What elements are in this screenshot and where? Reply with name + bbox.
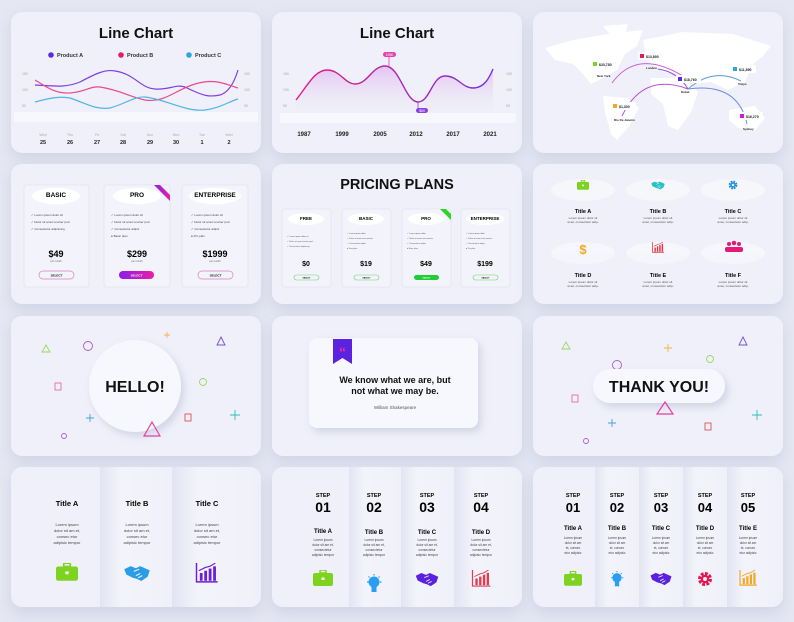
item: title E: amet, consectetur adip- (642, 284, 674, 288)
x axis labels: Mon (173, 133, 179, 137)
card: pro: SELECT (423, 278, 431, 280)
item: title F: Lorem ipsum dolor sit (719, 280, 748, 284)
column: title A: Title A (56, 499, 79, 508)
column: title C: adipisic tempor (194, 540, 221, 545)
item: title D: amet, consectetur adip- (567, 284, 599, 288)
line chart: 150 (244, 72, 250, 76)
step 03: 03 (654, 500, 668, 515)
line chart: 150 (22, 72, 28, 76)
column: title B: adipisic tempor (124, 540, 151, 545)
card: pro: ● Basic plan (407, 248, 418, 250)
step 03: Title C (652, 526, 671, 532)
card: pro: ✓ Lorem ipsum dolor sit (111, 213, 143, 217)
card: enterprise: ● Pro plan (191, 234, 205, 238)
legend: Product A (57, 53, 83, 59)
card: enterprise: SELECT (482, 278, 490, 280)
map continents (545, 24, 771, 140)
column: title A (54, 499, 81, 581)
title: Line Chart (360, 25, 434, 42)
step 01: etur adipisic (564, 551, 582, 555)
card: free: FREE (300, 216, 312, 221)
card: basic: ✓ Dolor sit amet concter pod (31, 220, 70, 224)
card: enterprise: ✓ Dolor sit amet concter pod (191, 220, 230, 224)
area line chart: 50 (506, 104, 510, 108)
value tags: $16,270 (746, 115, 759, 119)
card: enterprise: $199 (477, 261, 493, 268)
step 02: dolor sit am (609, 541, 626, 545)
item: title F (717, 241, 749, 288)
step 01: STEP (566, 493, 581, 499)
area line chart: 150 (283, 72, 289, 76)
step 05: 05 (741, 500, 755, 515)
step 04: et, consec (698, 546, 713, 550)
value tags: $18,760 (684, 78, 697, 82)
legend (48, 52, 221, 59)
step 03: Lorem ipsum (417, 538, 437, 542)
step 03: adipisic tempor (416, 553, 439, 557)
card: pro: PRO (421, 216, 431, 221)
panel: five steps (533, 467, 783, 607)
item: title D: $ (579, 242, 587, 257)
item: title E (642, 242, 674, 288)
step 04: STEP (474, 493, 489, 499)
hello circle (89, 340, 181, 432)
x axis labels: Sat (120, 133, 126, 137)
step 04: consectetur (472, 548, 490, 552)
step 04: Title D (696, 526, 715, 532)
year labels: 1987 (297, 132, 311, 138)
item: title E: Lorem ipsum dolor sit (644, 280, 672, 284)
quote card: William Shakespeare (374, 405, 417, 410)
area line chart: $50 (419, 109, 425, 113)
item: title B: Title B (650, 209, 666, 215)
decorative shapes (562, 337, 762, 444)
card: basic: SELECT (51, 274, 63, 278)
step 02: Title B (608, 526, 627, 532)
city labels: New York (597, 74, 611, 78)
step 04: 04 (698, 500, 713, 515)
card: basic: ● Free plan (347, 248, 357, 250)
column: title B: Lorem ipsum (125, 522, 149, 527)
card: basic: BASIC (359, 216, 374, 221)
step 05: etur adipisic (739, 551, 757, 555)
card: basic: $19 (360, 261, 372, 268)
card: basic: per month (50, 260, 62, 263)
column: title A: dolor sit am et, (54, 528, 80, 533)
card: pro (104, 185, 170, 287)
card: enterprise: SELECT (210, 274, 222, 278)
step 04: Title D (472, 530, 491, 536)
line chart: 100 (22, 88, 28, 92)
step 03: STEP (654, 493, 669, 499)
card: basic (24, 185, 89, 287)
icon: bookmark quote: “ (339, 344, 346, 360)
decorative shapes (42, 332, 240, 438)
title: PRICING PLANS (340, 177, 454, 193)
card: basic: ✓ Lorem ipsum dolor (347, 232, 366, 235)
item: title D (567, 242, 599, 288)
step 02: 02 (366, 499, 382, 515)
value tags: $13,890 (646, 55, 659, 59)
quote card (309, 338, 478, 428)
step 03: Title C (418, 530, 437, 536)
panel: line chart years (272, 12, 522, 153)
step 02: et, consec (610, 546, 625, 550)
x axis labels: 2 (227, 140, 231, 146)
column: title B: Title B (126, 499, 149, 508)
value tags: $1,300 (619, 105, 630, 109)
quote text: not what we may be. (351, 386, 439, 396)
item: title A: Title A (575, 209, 591, 215)
column: title C: Lorem ipsum (195, 522, 219, 527)
step 01: consectetur (314, 548, 332, 552)
step 01: adipisic tempor (312, 553, 335, 557)
step 03: et, consec (654, 546, 669, 550)
city labels: Dubai (681, 90, 690, 94)
x axis labels: 27 (94, 140, 100, 146)
step 01: Lorem ipsum (313, 538, 333, 542)
step 03: 03 (419, 499, 435, 515)
item: title C: Title C (725, 209, 741, 215)
card: basic: ✓ Consectetur adipiscing (31, 227, 65, 231)
step 02: Lorem ipsum (608, 536, 627, 540)
city labels (597, 66, 754, 131)
step 01: dolor sit am et, (312, 543, 334, 547)
card: enterprise: ENTERPRISE (471, 216, 499, 221)
step 01: STEP (316, 493, 331, 499)
year labels: 1999 (335, 132, 349, 138)
panel: pricing plans 4 (272, 164, 522, 304)
line chart: 50 (22, 104, 26, 108)
card: basic: BASIC (46, 192, 66, 199)
step 03: STEP (420, 493, 435, 499)
x axis labels: Wed (39, 133, 47, 137)
x axis labels: Tue (199, 133, 205, 137)
panel: world map (533, 12, 783, 153)
item: title D: Lorem ipsum dolor sit (569, 280, 598, 284)
column: title A: consec etur (57, 534, 78, 539)
step 02: dolor sit am et, (363, 543, 385, 547)
step 01 (564, 493, 583, 586)
value tags (591, 52, 763, 120)
item: title C (717, 182, 749, 224)
step 04: adipisic tempor (470, 553, 493, 557)
item: title D: Title D (575, 273, 591, 279)
column: title B: dolor sit am et, (124, 528, 150, 533)
panel: line chart products (11, 12, 261, 153)
step 03: Lorem ipsum (652, 536, 671, 540)
area line chart: 150 (506, 72, 512, 76)
step 05: dolor sit am (740, 541, 757, 545)
triangle accent (657, 402, 673, 414)
column: title C: Title C (196, 499, 219, 508)
step 04: STEP (698, 493, 713, 499)
card: enterprise (461, 209, 510, 287)
item: title C: amet, consectetur adip- (717, 220, 749, 224)
card: free: ✓ Lorem ipsum dolor sit (287, 235, 309, 238)
card: pro: $299 (127, 249, 147, 259)
city labels: Sydney (743, 127, 754, 131)
step 04: dolor sit am et, (470, 543, 492, 547)
step 05: Title E (739, 526, 757, 532)
step 04: Lorem ipsum (471, 538, 491, 542)
card: enterprise: ENTERPRISE (194, 192, 236, 199)
card: free: ✓ Dolor sit amet concter pod (287, 240, 313, 243)
step 02: STEP (610, 493, 625, 499)
legend: Product C (195, 53, 221, 59)
card: enterprise: $1999 (202, 249, 228, 259)
column: title B (124, 499, 151, 581)
x axis labels: Thu (67, 133, 73, 137)
step 05: et, consec (741, 546, 756, 550)
step 02 (363, 493, 386, 592)
line chart: 100 (244, 88, 250, 92)
step 02: Lorem ipsum (364, 538, 384, 542)
legend: Product B (127, 53, 153, 59)
area line chart: 100 (283, 88, 289, 92)
column: title A: adipisic tempor (54, 540, 81, 545)
area line chart (280, 52, 516, 123)
routes (612, 64, 747, 124)
x axis labels: 30 (173, 140, 179, 146)
x axis labels: Sun (147, 133, 153, 137)
step 03 (650, 493, 672, 585)
year labels: 2005 (373, 132, 387, 138)
step 02: STEP (367, 493, 382, 499)
area line chart: 1950 (386, 53, 393, 57)
year labels (297, 132, 497, 138)
card: pro: per month (131, 260, 143, 263)
column: title C (194, 499, 221, 582)
step 03: etur adipisic (652, 551, 670, 555)
card: basic: $49 (48, 249, 64, 259)
card: enterprise: ● Pro plan (466, 248, 475, 250)
card: basic (342, 209, 391, 287)
year labels: 2012 (409, 132, 423, 138)
x axis labels: 25 (40, 140, 46, 146)
step 01: 01 (566, 500, 580, 515)
card: basic: ✓ Consectetur adipis (347, 242, 366, 245)
card: basic: ✓ Dolor sit amet cons mecter (347, 237, 373, 240)
step 02 (608, 493, 627, 586)
step 02: Title B (365, 530, 384, 536)
step 01: dolor sit am (565, 541, 582, 545)
step 01: Title A (564, 526, 583, 532)
card: basic: ✓ Lorem ipsum dolor sit (31, 213, 63, 217)
item: title C: Lorem ipsum dolor sit (719, 216, 748, 220)
thank you pill (593, 369, 725, 403)
area line chart: 100 (506, 88, 512, 92)
step 04: 04 (473, 499, 489, 515)
card: pro: ✓ Consectetur adipis (111, 227, 140, 231)
step 03 (416, 493, 439, 586)
line chart: 50 (244, 104, 248, 108)
item: title F: amet, consectetur adip- (717, 284, 749, 288)
panel: thank you (533, 316, 783, 456)
year labels: 2017 (446, 132, 460, 138)
icon: bookmark quote (333, 339, 352, 364)
step 04 (696, 493, 715, 584)
card: enterprise: ✓ Lorem ipsum dolor (466, 232, 485, 235)
step 04: etur adipisic (696, 551, 714, 555)
step 02: etur adipisic (608, 551, 626, 555)
card: pro: ✓ Dolor sit amet cons mecter (407, 237, 433, 240)
card: free: ✓ Consectetur adipiscing (287, 245, 309, 248)
triangle accent (144, 422, 160, 436)
city labels: Tokyo (738, 82, 747, 86)
hello circle: HELLO! (105, 379, 165, 396)
card: free: $0 (302, 261, 310, 268)
card: basic: SELECT (363, 278, 371, 280)
step 05: Lorem ipsum (739, 536, 758, 540)
item: title F: Title F (725, 273, 742, 279)
item: title B: amet, consectetur adip- (642, 220, 674, 224)
card: enterprise (182, 185, 248, 287)
card: pro: SELECT (131, 274, 143, 278)
card: pro: ✓ Dolor sit amet concter pod (111, 220, 150, 224)
x axis labels: 28 (120, 140, 126, 146)
step 04 (470, 493, 493, 586)
item: title A: Lorem ipsum dolor sit (569, 216, 598, 220)
card: pro: $49 (420, 261, 432, 268)
step 01: Lorem ipsum (564, 536, 583, 540)
quote text: We know what we are, but (339, 375, 451, 385)
step 04: dolor sit am (697, 541, 714, 545)
city labels: London (646, 66, 657, 70)
panel: pricing cards 3 (11, 164, 261, 304)
quote text (339, 375, 451, 396)
panel: six icon features (533, 164, 783, 304)
step 03: consectetur (418, 548, 436, 552)
city labels: Rio De Janeiro (614, 118, 635, 122)
item: title B: Lorem ipsum dolor sit (644, 216, 672, 220)
card: pro: ● Basic plan (111, 234, 128, 238)
step 01: 01 (315, 499, 331, 515)
column: title A: Lorem ipsum (55, 522, 79, 527)
card: free (282, 209, 331, 287)
x axis labels: Wed (225, 133, 233, 137)
card: enterprise: per month (209, 260, 221, 263)
column: title C: dolor sit am et, (194, 528, 220, 533)
item: title B (642, 182, 674, 224)
step 02: 02 (610, 500, 624, 515)
step 03: dolor sit am (653, 541, 670, 545)
x axis labels: Fri (95, 133, 99, 137)
x axis labels: 26 (67, 140, 73, 146)
line chart (14, 70, 258, 122)
panel: three titles (11, 467, 261, 607)
item: title E: Title E (650, 273, 667, 279)
value tags: $11,890 (739, 68, 752, 72)
panel: four steps (272, 467, 522, 607)
step 03: dolor sit am et, (416, 543, 438, 547)
step 01: et, consec (566, 546, 581, 550)
item: title A: amet, consectetur adip- (567, 220, 599, 224)
value tags: $33,780 (599, 63, 612, 67)
x axis labels: 29 (147, 140, 153, 146)
card: free: SELECT (303, 278, 311, 280)
column: title C: consec etur (197, 534, 218, 539)
card: enterprise: ✓ Lorem ipsum dolor sit (191, 213, 223, 217)
card: pro: ✓ Consectetur adipis (407, 242, 426, 245)
panel: quote (272, 316, 522, 456)
card: enterprise: ✓ Consectetur adipis (466, 242, 485, 245)
year labels: 2021 (483, 132, 497, 138)
card: pro: ✓ Lorem ipsum dolor (407, 232, 426, 235)
card: pro: PRO (130, 192, 144, 199)
step 02: consectetur (365, 548, 383, 552)
thank you pill: THANK YOU! (609, 379, 709, 396)
x axis labels: 1 (200, 140, 204, 146)
step 01: Title A (314, 529, 333, 535)
panel: hello (11, 316, 261, 456)
card: pro (402, 209, 451, 287)
column: title B: consec etur (127, 534, 148, 539)
step 05 (739, 493, 758, 585)
step 02: adipisic tempor (363, 553, 386, 557)
step 05: STEP (741, 493, 756, 499)
step 04: Lorem ipsum (696, 536, 715, 540)
title: Line Chart (99, 25, 173, 42)
area line chart: 50 (283, 104, 287, 108)
card: enterprise: ✓ Consectetur adipis (191, 227, 220, 231)
item: title A (567, 180, 599, 224)
card: enterprise: ✓ Dolor sit amet cons mecter (466, 237, 492, 240)
step 01 (312, 493, 335, 586)
x axis labels (39, 133, 233, 146)
